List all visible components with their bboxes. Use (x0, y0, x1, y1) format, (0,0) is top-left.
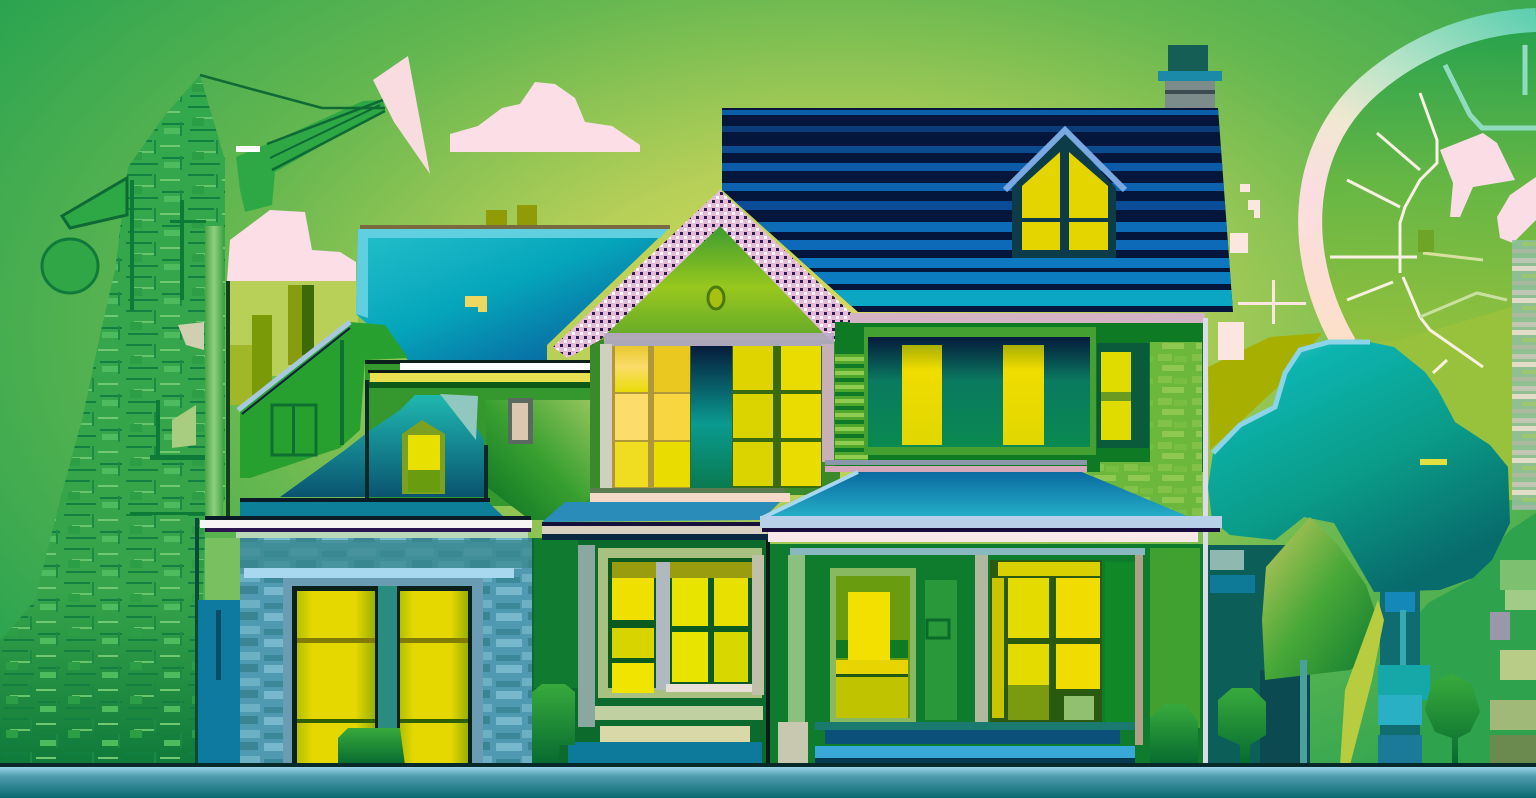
left small gable (238, 322, 408, 478)
background buildings right (1208, 545, 1310, 765)
porch pillars and beam (778, 548, 1145, 765)
lower window frame (598, 548, 764, 698)
gable vent (708, 287, 724, 309)
middle lower bay (532, 538, 768, 765)
front steps (815, 722, 1135, 765)
front door (830, 568, 957, 724)
globe patch (1418, 230, 1434, 252)
city skyline (226, 281, 358, 521)
teal small dormer (280, 380, 488, 500)
small beige window (508, 398, 533, 444)
middle eave (542, 502, 780, 540)
mid green bush (532, 684, 575, 765)
upper bay wall (590, 340, 840, 495)
globe rim arc (1310, 20, 1536, 345)
crane (0, 56, 430, 765)
globe teal lines (1445, 45, 1536, 128)
road (0, 763, 1536, 798)
right green tree (1405, 513, 1536, 765)
left eave (200, 498, 532, 538)
chimney (1158, 45, 1222, 108)
globe continent (1440, 133, 1515, 217)
globe continent right (1497, 177, 1536, 243)
green gable front (598, 224, 830, 340)
green round bush (485, 400, 600, 520)
porch steps (568, 706, 763, 765)
small chimneys (486, 205, 537, 229)
cloud left (227, 210, 356, 281)
garage bush (338, 728, 405, 765)
upper porch sill (590, 488, 790, 502)
garage door (283, 578, 483, 765)
porch roof (760, 460, 1222, 542)
crane pillar (205, 226, 223, 526)
tall green tree (1262, 517, 1384, 765)
pink gable trim (553, 190, 878, 358)
teal roof (356, 225, 670, 360)
globe (1310, 20, 1536, 500)
crane pink flag (373, 56, 430, 174)
right pale column (1512, 240, 1536, 510)
globe lower blend (1350, 300, 1536, 500)
stone wall (240, 538, 532, 765)
mid section wall with bar (365, 360, 600, 506)
upper right wide window (864, 327, 1096, 455)
crane tower (0, 75, 225, 765)
sparkles near globe (1218, 184, 1306, 360)
crane back arm (62, 178, 127, 228)
small side window (1097, 343, 1149, 448)
crane boom arm (200, 75, 385, 212)
globe grid lines (1330, 93, 1507, 373)
pale blocks right (1490, 560, 1536, 765)
teal blocks under tree (1378, 590, 1430, 765)
olive hill right (1208, 333, 1322, 450)
lower left green strip and blue shed (198, 538, 240, 765)
upper right wall (835, 313, 1208, 518)
upper bay window (600, 333, 834, 492)
porch window (990, 560, 1102, 725)
dormer on main roof (1005, 130, 1125, 258)
cloud top (450, 82, 640, 152)
bushes (1150, 674, 1480, 765)
lower porch wall (766, 532, 1208, 765)
big teal tree (1208, 342, 1510, 592)
crane counterweight (42, 239, 98, 293)
dark blue main roof (720, 108, 1240, 312)
